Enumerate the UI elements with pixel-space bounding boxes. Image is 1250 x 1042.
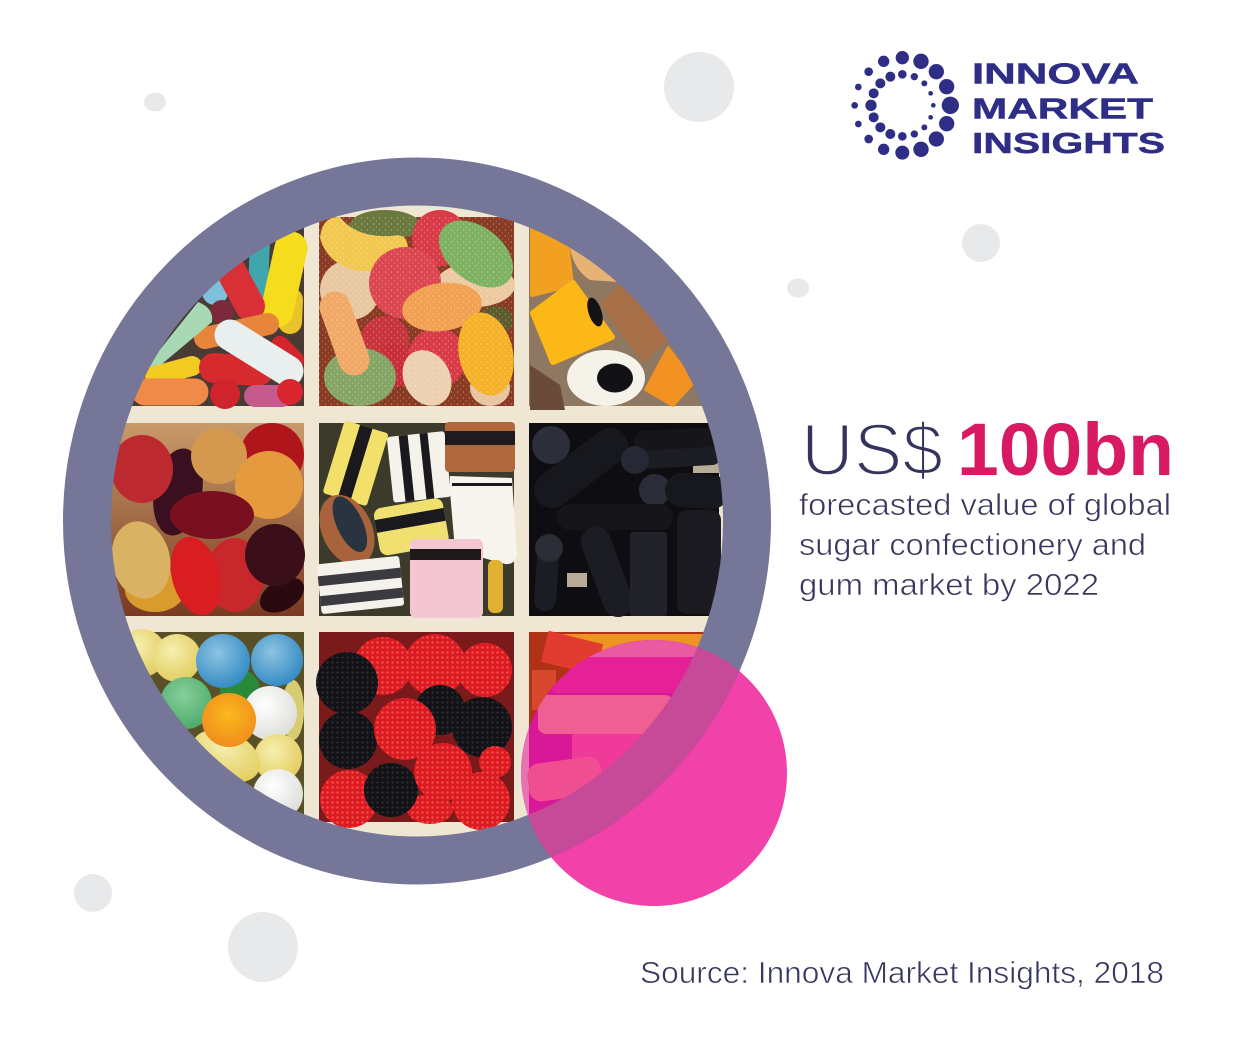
logo wordmark: INSIGHTS bbox=[972, 128, 1165, 160]
sandwich: yellow with black bbox=[373, 497, 450, 557]
compartment: sugared jelly slices bbox=[319, 210, 515, 406]
stick: yellow bbox=[488, 560, 503, 613]
pink strips seen through the circle bbox=[521, 640, 740, 857]
compartment: raspberry and blackberry gums bbox=[316, 632, 514, 830]
sandwich: brown and black bbox=[445, 422, 515, 472]
logo: Innova Market Insights bbox=[851, 51, 1165, 160]
compartment: liquorice allsorts rolls bbox=[529, 228, 702, 410]
background dots bbox=[74, 52, 1000, 982]
roll: white block bbox=[450, 476, 517, 564]
logo wordmark: INNOVA bbox=[972, 58, 1139, 90]
description text: gum market by 2022 bbox=[799, 567, 1099, 602]
compartment: liquorice allsorts bbox=[309, 420, 517, 618]
compartment: candy sticks bbox=[132, 228, 308, 409]
description text: forecasted value of global bbox=[799, 487, 1171, 522]
source note: Source: Innova Market Insights, 2018 bbox=[640, 955, 1164, 990]
compartment: black liquorice bbox=[529, 423, 721, 616]
description text bbox=[799, 487, 1171, 602]
ring around photo bbox=[87, 182, 747, 860]
description text: sugar confectionery and bbox=[799, 527, 1146, 562]
logo wordmark: MARKET bbox=[972, 94, 1153, 126]
pink translucent circle bbox=[521, 640, 787, 906]
disc: brown and black bbox=[320, 494, 374, 562]
ring seen through the circle bbox=[528, 648, 740, 857]
headline: US$ 100bn bbox=[801, 408, 1174, 491]
logo wordmark bbox=[972, 58, 1165, 160]
headline: US$ 100bn: US$ bbox=[801, 410, 943, 491]
compartment: gumballs bbox=[130, 629, 304, 814]
circular photo of sweets in a wooden tray bbox=[100, 195, 740, 845]
compartment: fruit gums bbox=[111, 423, 305, 616]
wooden tray bbox=[100, 195, 740, 845]
cube: pink bbox=[410, 539, 483, 618]
headline: US$ 100bn: 100bn bbox=[957, 408, 1174, 491]
icon: dotted ring bbox=[851, 51, 959, 160]
sandwich: yellow and black bbox=[323, 420, 389, 506]
sandwich: white and black stripes bbox=[387, 431, 451, 503]
sandwich: layered grey and white bbox=[317, 556, 404, 614]
compartment: sugared strips bbox=[529, 630, 704, 728]
